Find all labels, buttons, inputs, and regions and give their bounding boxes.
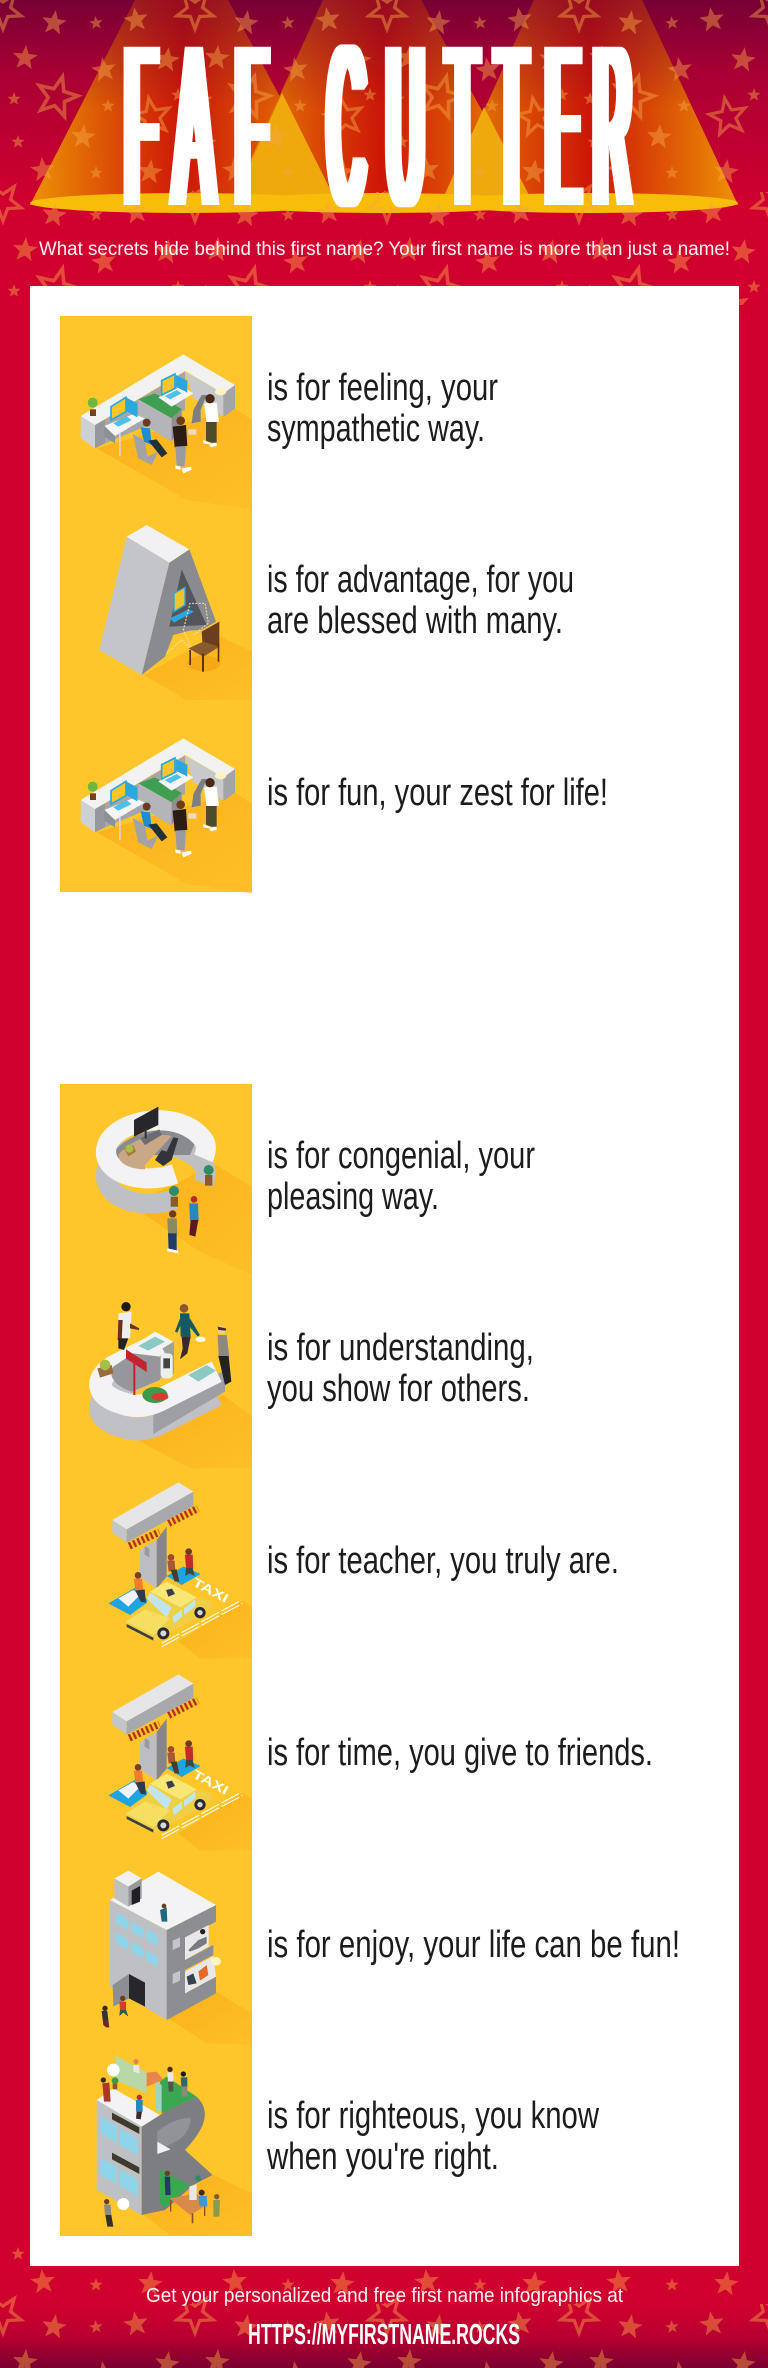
title: U <box>387 0 424 255</box>
icon: letter F office <box>81 354 252 509</box>
text: letter C line <box>267 1135 535 1218</box>
title <box>125 0 631 255</box>
title: F <box>236 0 267 255</box>
footer call to action: Get your personalized and free first name infographics at <box>146 2285 623 2307</box>
title: T <box>447 0 478 255</box>
text: letter R line: when you're right. <box>266 2136 499 2178</box>
text: letter C line: pleasing way. <box>267 1176 439 1218</box>
star pattern bottom <box>0 2245 768 2368</box>
icon: letter U food court <box>97 1302 252 1468</box>
star pattern top <box>0 0 768 305</box>
text: letter U line <box>267 1327 534 1410</box>
text: letter F line: is for feeling, your <box>267 367 498 409</box>
text: letter U line: is for understanding, <box>267 1327 534 1369</box>
text: letter R line <box>266 2095 599 2178</box>
text: letter A line <box>267 559 574 642</box>
text: letter F line: sympathetic way. <box>267 408 485 450</box>
icon: letter C reception <box>106 1107 252 1275</box>
text: letter U line: you show for others. <box>267 1368 530 1410</box>
icon: letter T taxi: TAXI <box>190 1575 231 1606</box>
text: letter F fun line: is for fun, your zest for life! <box>267 772 608 814</box>
text: letter T time line: is for time, you give to friends. <box>267 1732 653 1774</box>
text: letter A line: is for advantage, for you <box>267 559 574 601</box>
icon: letter A <box>99 525 252 700</box>
title: R <box>594 0 631 255</box>
icon: letter R building <box>97 2056 252 2235</box>
title: E <box>546 0 580 255</box>
text: letter C line: is for congenial, your <box>267 1135 535 1177</box>
icon: letter F office repeat <box>81 738 252 893</box>
yellow column bottom <box>60 1084 252 2236</box>
text: letter F line <box>267 367 498 450</box>
title: T <box>496 0 527 255</box>
spotlights <box>30 0 738 213</box>
title: C <box>328 0 365 255</box>
subtitle: What secrets hide behind this first name? Your first name is more than just a name! <box>39 239 730 260</box>
text: letter A line: are blessed with many. <box>267 600 563 642</box>
white panel <box>30 286 739 2266</box>
title: F <box>125 0 156 255</box>
icon: letter E building <box>102 1871 252 2045</box>
icon: letter T taxi <box>108 1482 252 1658</box>
footer url: HTTPS://MYFIRSTNAME.ROCKS <box>248 2319 520 2351</box>
icon: letter T taxi repeat: TAXI <box>190 1767 231 1798</box>
text: letter T teacher line: is for teacher, you truly are. <box>267 1540 619 1582</box>
text: letter R line: is for righteous, you know <box>267 2095 599 2137</box>
yellow column top <box>60 316 252 892</box>
title: A <box>174 0 214 255</box>
icon: letter T taxi repeat <box>108 1674 252 1850</box>
